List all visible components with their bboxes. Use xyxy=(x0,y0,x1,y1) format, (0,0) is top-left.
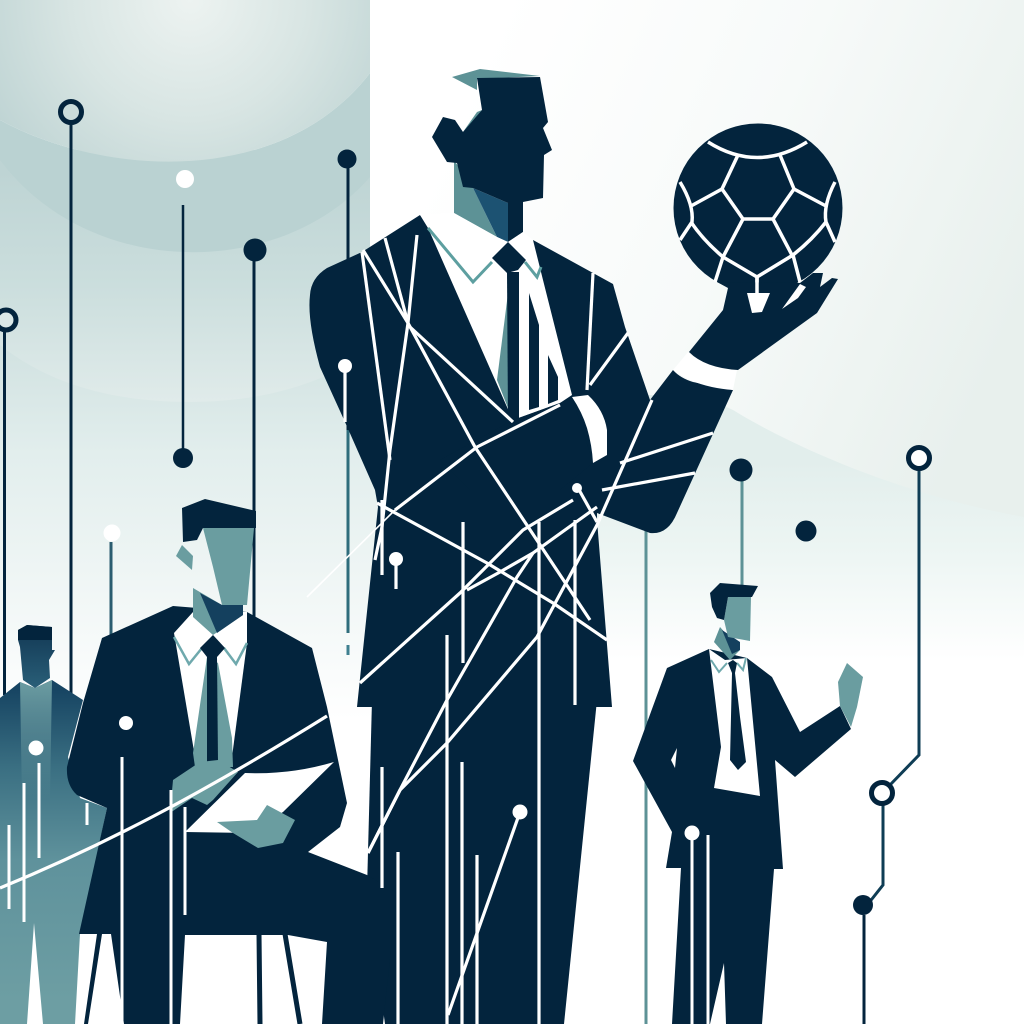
armpit gap xyxy=(671,748,677,768)
cuff xyxy=(572,395,607,463)
figure: large central executive xyxy=(309,69,737,1024)
neck and head xyxy=(714,627,740,660)
chair legs xyxy=(259,934,300,1024)
shirt xyxy=(420,213,572,420)
figure: seated man xyxy=(67,499,397,1024)
white string nodes xyxy=(338,359,582,820)
node: ring top left xyxy=(60,102,82,122)
legs xyxy=(367,700,597,1024)
strings wrapped around executive xyxy=(0,235,713,1024)
node: ring right xyxy=(908,448,930,468)
jacket xyxy=(309,215,733,707)
neck shadow xyxy=(454,160,497,237)
node: ring lower right xyxy=(872,782,892,804)
icon: open hand under ball xyxy=(689,273,838,370)
solid nodes xyxy=(173,150,873,915)
neck and face xyxy=(193,588,243,635)
forearm across xyxy=(440,397,593,490)
node: ring far left xyxy=(0,310,16,330)
tie xyxy=(193,657,233,767)
figure: standing man right xyxy=(633,583,863,1024)
paper xyxy=(185,762,334,833)
figure: small man far left xyxy=(0,625,107,1024)
head xyxy=(432,77,552,242)
icon: ball xyxy=(674,124,842,295)
tie xyxy=(492,242,526,273)
hand holding pen xyxy=(170,760,238,813)
raised sleeve cuff xyxy=(673,352,737,390)
hand on paper xyxy=(217,805,295,848)
white nodes on background xyxy=(104,170,194,542)
tie xyxy=(728,660,746,770)
shirt xyxy=(174,612,247,757)
raised hand xyxy=(838,663,863,727)
shirt xyxy=(709,649,760,796)
hair highlight xyxy=(452,69,540,90)
